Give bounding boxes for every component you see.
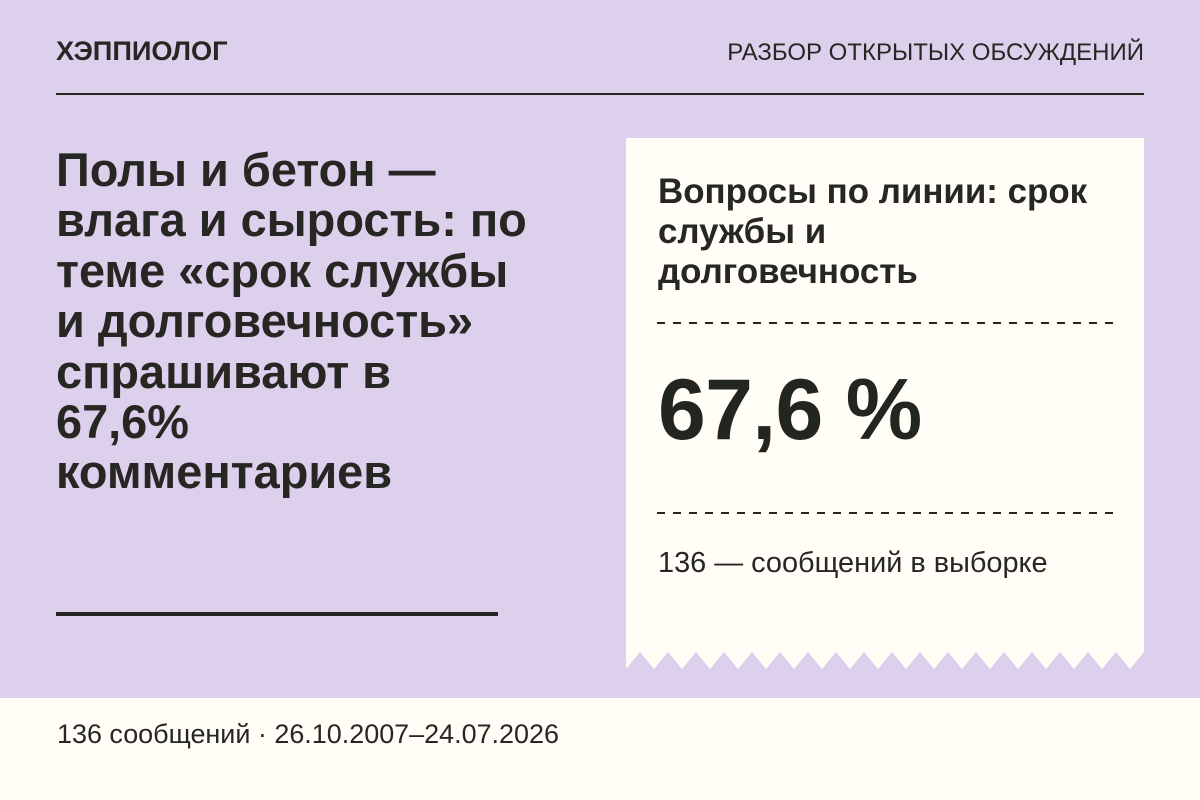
main heading — [56, 144, 527, 498]
dashed divider top — [657, 322, 1113, 324]
card heading: Вопросы по линии: срок — [658, 172, 1087, 211]
main heading: влага и сырость: по — [56, 194, 527, 246]
footer text: 136 сообщений · 26.10.2007–24.07.2026 — [57, 719, 559, 749]
dashed divider bottom — [657, 512, 1113, 514]
heading underline — [56, 612, 498, 616]
main heading: теме «срок службы — [56, 245, 508, 297]
header brand: ХЭППИОЛОГ — [56, 35, 228, 66]
receipt background with zigzag edge — [626, 138, 1144, 669]
header subtitle: РАЗБОР ОТКРЫТЫХ ОБСУЖДЕНИЙ — [727, 39, 1144, 66]
sample size note: 136 — сообщений в выборке — [658, 547, 1048, 579]
panel: receipt card — [626, 138, 1144, 669]
main heading: Полы и бетон — — [56, 144, 436, 196]
main heading: 67,6% — [56, 396, 189, 448]
big percentage: 67,6 % — [658, 362, 922, 458]
header rule — [56, 93, 1144, 95]
card heading — [658, 172, 1087, 291]
card heading: службы и — [658, 212, 826, 251]
card heading: долговечность — [658, 252, 918, 291]
main heading: комментариев — [56, 446, 392, 498]
footer band — [0, 698, 1200, 800]
main heading: и долговечность» — [56, 295, 473, 347]
main heading: спрашивают в — [56, 346, 391, 398]
